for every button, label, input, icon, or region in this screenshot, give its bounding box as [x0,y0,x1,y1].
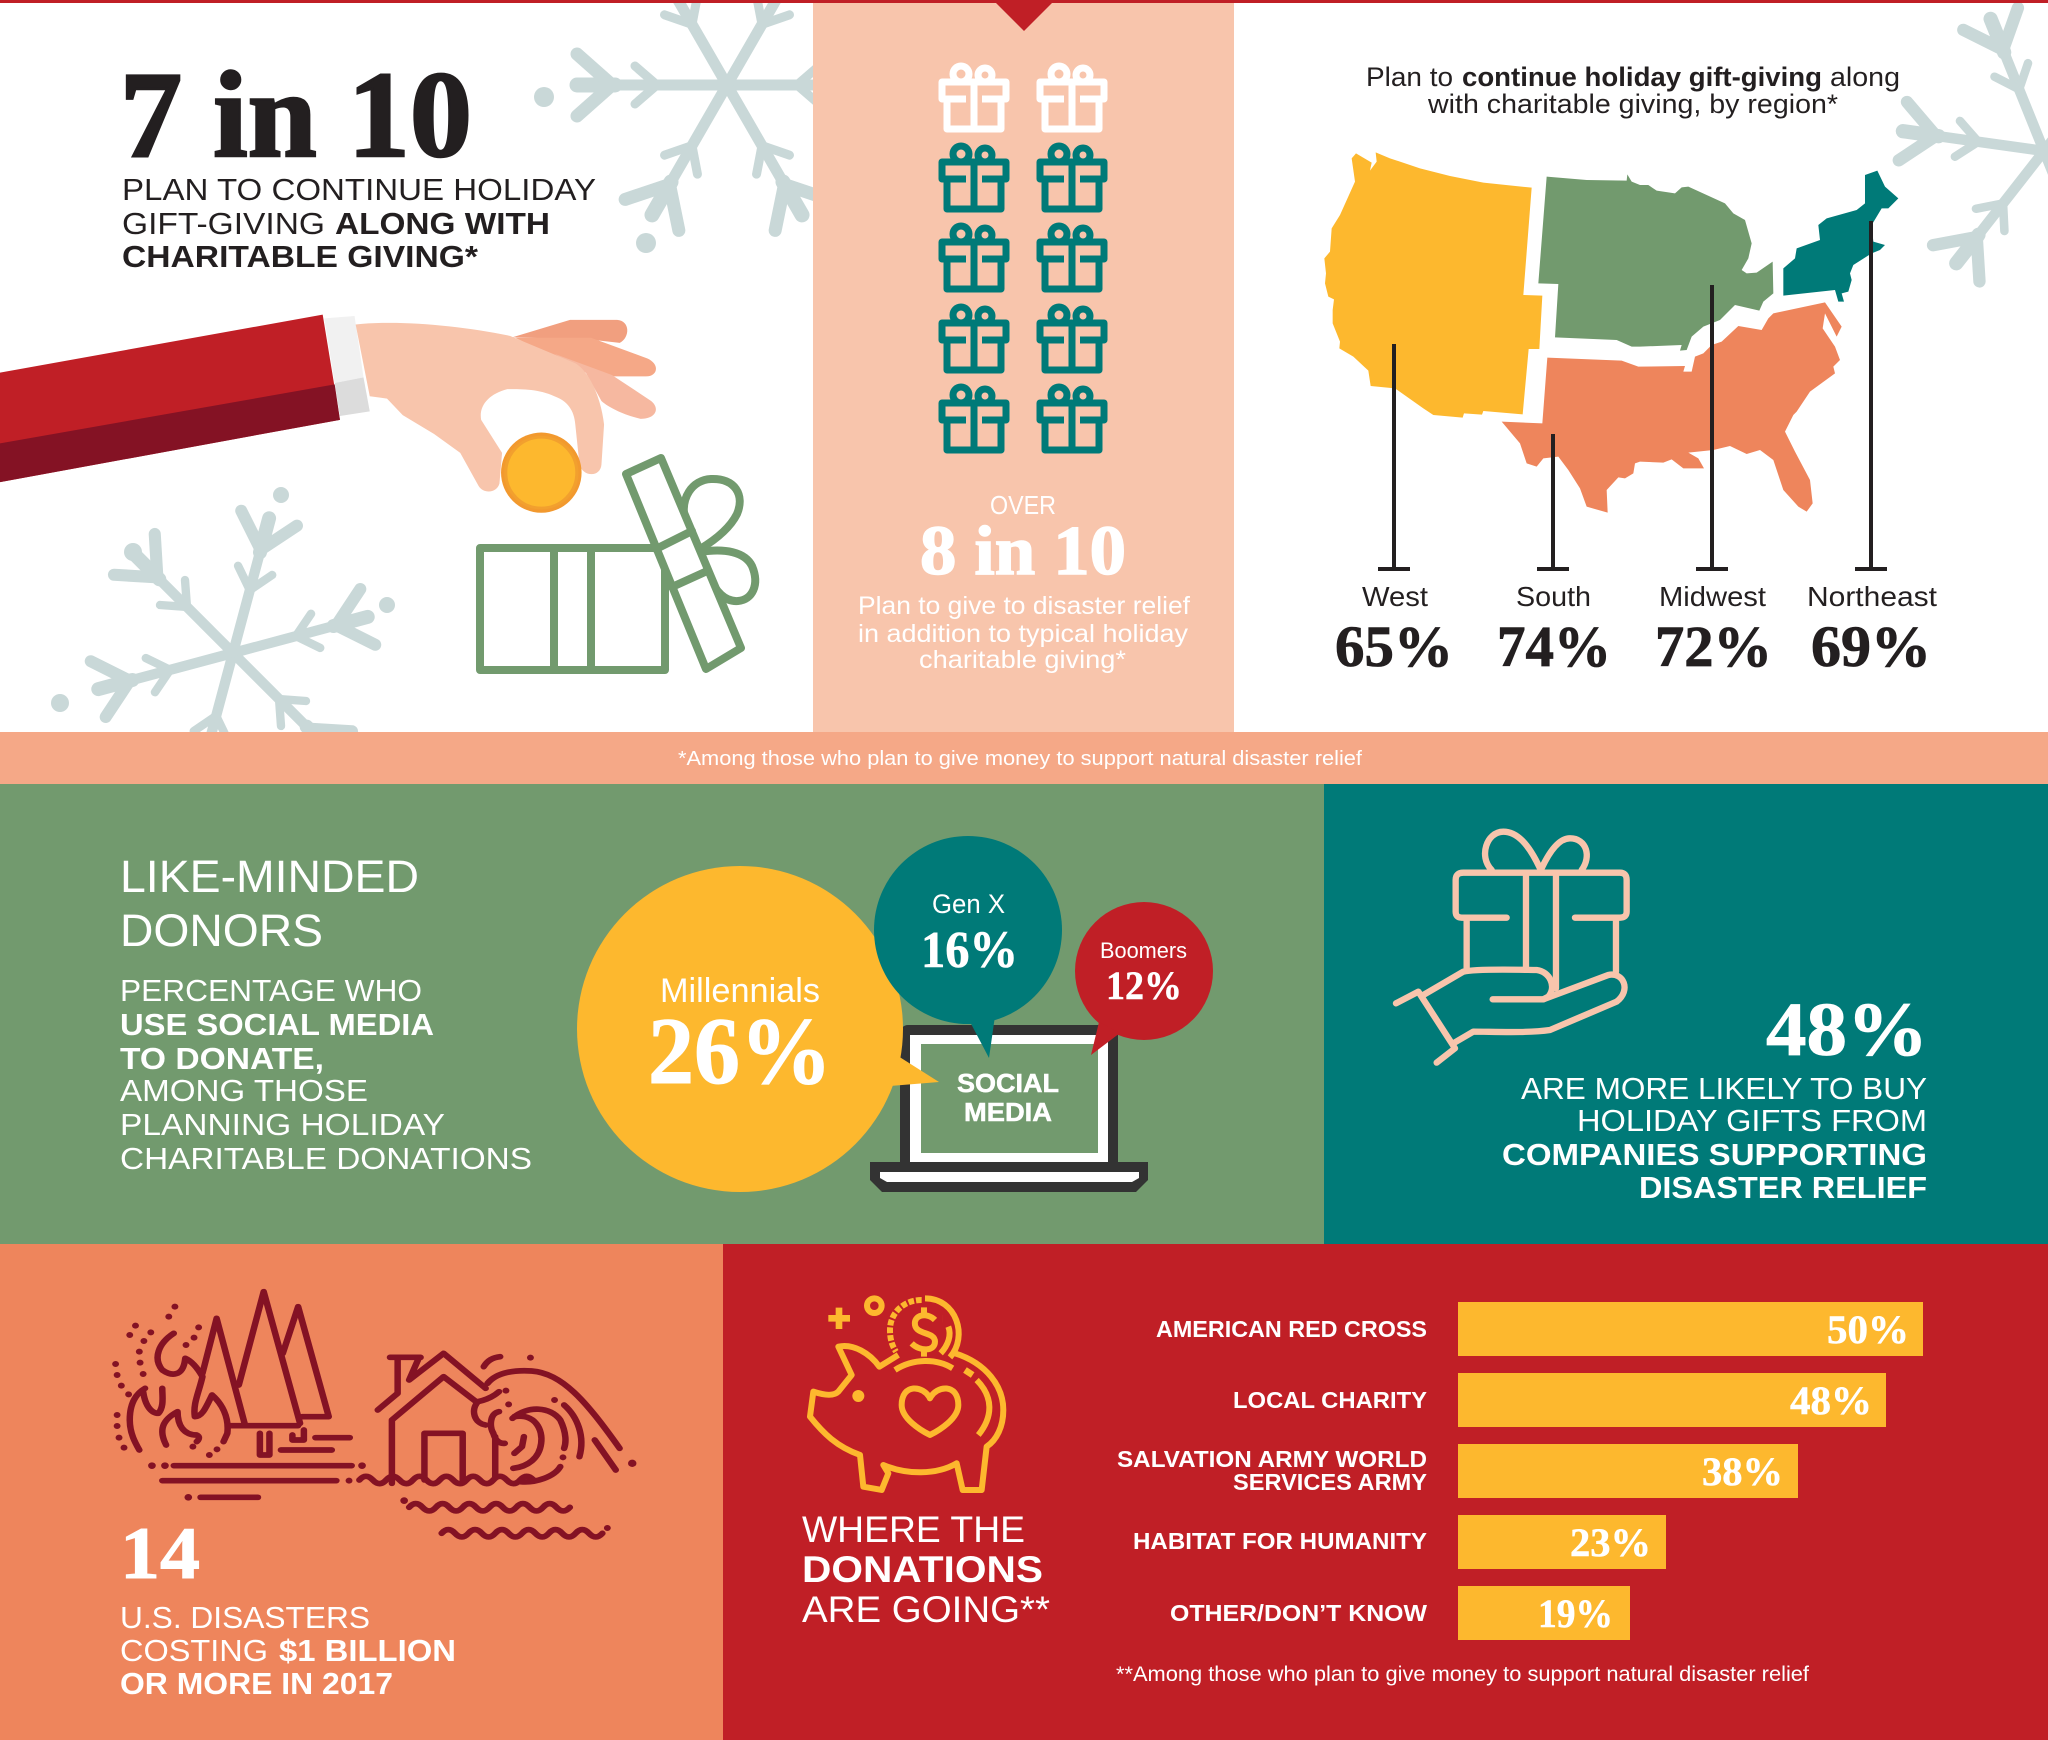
bubble: boomers [1075,902,1213,1055]
region: northeast [1783,171,1898,302]
text: billion dollar disasters: OR MORE IN 2017 [120,1666,393,1701]
icon: open gift box [480,458,755,670]
bubble: millennials: Millennials [660,972,820,1010]
bubble: gen x: 16% [921,922,1018,979]
footnote strip: *Among those who plan to give money to support natural disaster relief [678,748,1362,770]
panel: where donations go [723,1244,2048,1740]
heading: by region: continue holiday gift-giving [1462,62,1822,92]
text: disaster relief [858,592,1190,674]
region: midwest [1538,174,1773,351]
bar: other or don't know: OTHER/DON’T KNOW [1170,1600,1427,1626]
label: midwest: Midwest [1659,581,1766,612]
text: disaster relief: charitable giving* [919,646,1126,674]
label: northeast: Northeast [1807,581,1937,612]
heading: 7 in 10: 7 in 10 [120,46,472,183]
heading: by region: with charitable giving, by region* [1427,89,1839,119]
heading: by region [1366,62,1900,119]
bubble: boomers: 12% [1106,963,1182,1008]
label: south: 74% [1497,614,1611,679]
panel: eight in ten [813,0,1234,733]
icon: piggy bank [810,1298,1003,1490]
text: over: OVER [990,490,1056,520]
snowflake top [534,3,813,253]
bubble: gen x [874,836,1062,1058]
region: west [1324,152,1542,418]
illustration: arm and hand holding coin [0,315,656,513]
bar: american red cross: AMERICAN RED CROSS [1156,1316,1427,1342]
heading: where the donations are going [802,1509,1050,1630]
footnote: donations: **Among those who plan to give money to support natural disaster relief [1116,1663,1809,1686]
text: companies supporting disaster relief: DISASTER RELIEF [1639,1170,1927,1205]
text: plan to continue: ALONG WITH [335,206,550,241]
text: companies supporting disaster relief: COMPANIES SUPPORTING [1502,1137,1927,1172]
region: south [1502,302,1842,513]
bar: local charity: LOCAL CHARITY [1233,1387,1427,1413]
text: companies supporting disaster relief: ARE MORE LIKELY TO BUY [1521,1071,1927,1106]
label: south: South [1516,581,1591,612]
bubble: gen x: Gen X [932,889,1005,919]
heading: like-minded donors [120,851,419,956]
text: companies supporting disaster relief: HOLIDAY GIFTS FROM [1577,1103,1927,1138]
bar: other or don't know [1170,1586,1630,1640]
bar: local charity: 48% [1790,1378,1872,1423]
bar: american red cross: 50% [1827,1307,1909,1352]
text: social media percentage: TO DONATE, [120,1041,324,1076]
bar: salvation army: 38% [1702,1449,1783,1494]
label: northeast [1807,581,1937,679]
text: companies supporting disaster relief [1502,1071,1927,1205]
heading: like-minded donors: LIKE-MINDED [120,851,419,902]
bubble: millennials: 26% [648,998,832,1104]
heading: by region: Plan to [1366,62,1453,92]
panel: seven in ten [0,3,813,732]
text: plan to continue [122,172,596,274]
bar: habitat for humanity: 23% [1570,1520,1651,1565]
icon: laptop: MEDIA [964,1097,1052,1127]
label: west: 65% [1335,614,1453,679]
label: northeast: 69% [1811,614,1931,679]
top red rule [0,0,2048,3]
label: west [1335,581,1453,679]
text: billion dollar disasters: COSTING [120,1633,268,1668]
stat: 48 percent: 48% [1766,988,1928,1072]
bubble: boomers: Boomers [1100,938,1187,963]
text: social media percentage: USE SOCIAL MEDIA [120,1007,434,1042]
bar: habitat for humanity [1133,1515,1666,1569]
heading: where the donations are going: ARE GOING** [802,1589,1050,1630]
footnote strip [0,732,2048,784]
leader lines [1378,221,1887,569]
bar: american red cross [1156,1302,1923,1356]
snowflake bottom [51,487,395,732]
bar: salvation army [1117,1444,1798,1498]
text: plan to continue: GIFT-GIVING [122,206,325,241]
icon: laptop [870,1025,1148,1192]
icon: hand holding gift [1396,832,1627,1063]
text: billion dollar disasters: $1 BILLION [279,1633,456,1668]
label: midwest: 72% [1655,614,1772,679]
text: social media percentage: CHARITABLE DONATIONS [120,1141,532,1176]
stat: 14: 14 [120,1513,200,1595]
text: billion dollar disasters [120,1600,456,1701]
icon: top pointer [993,0,1055,31]
icon: gift grid [942,66,1104,450]
bar: salvation army: SERVICES ARMY [1233,1469,1427,1495]
text: social media percentage: AMONG THOSE [120,1073,368,1108]
label: midwest [1655,581,1772,679]
snowflake right [1892,3,2048,288]
icon: wildfire and flood [112,1292,636,1537]
text: plan to continue: PLAN TO CONTINUE HOLIDAY [122,172,596,207]
bar chart: donations [1117,1302,1923,1640]
label: south [1497,581,1611,679]
bar: other or don't know: 19% [1538,1591,1613,1636]
map of US regions [1324,152,1898,513]
heading: where the donations are going: WHERE THE [802,1509,1025,1550]
panel: like-minded donors [0,784,1324,1244]
text: disaster relief: in addition to typical holiday [858,620,1189,648]
icon: laptop: SOCIAL [957,1068,1059,1098]
panel: companies supporting relief [1324,784,2048,1244]
bar: habitat for humanity: HABITAT FOR HUMANITY [1133,1528,1427,1554]
label: west: West [1362,581,1428,612]
text: social media percentage: PERCENTAGE WHO [120,973,422,1008]
bubble: millennials [577,866,939,1192]
text: social media percentage: PLANNING HOLIDAY [120,1107,445,1142]
bar: local charity [1233,1373,1886,1427]
text: billion dollar disasters: U.S. DISASTERS [120,1600,370,1635]
text: plan to continue: CHARITABLE GIVING* [122,239,479,274]
bar: salvation army: SALVATION ARMY WORLD [1117,1446,1427,1472]
heading: where the donations are going: DONATIONS [802,1549,1043,1590]
text: social media percentage [120,973,532,1176]
panel: disasters [0,1244,723,1740]
heading: by region: along [1830,62,1900,92]
heading: like-minded donors: DONORS [120,905,323,956]
text: disaster relief: Plan to give to disaster relief [858,592,1190,620]
panel: regional map [1324,3,2048,668]
heading: 8 in 10: 8 in 10 [920,513,1126,590]
